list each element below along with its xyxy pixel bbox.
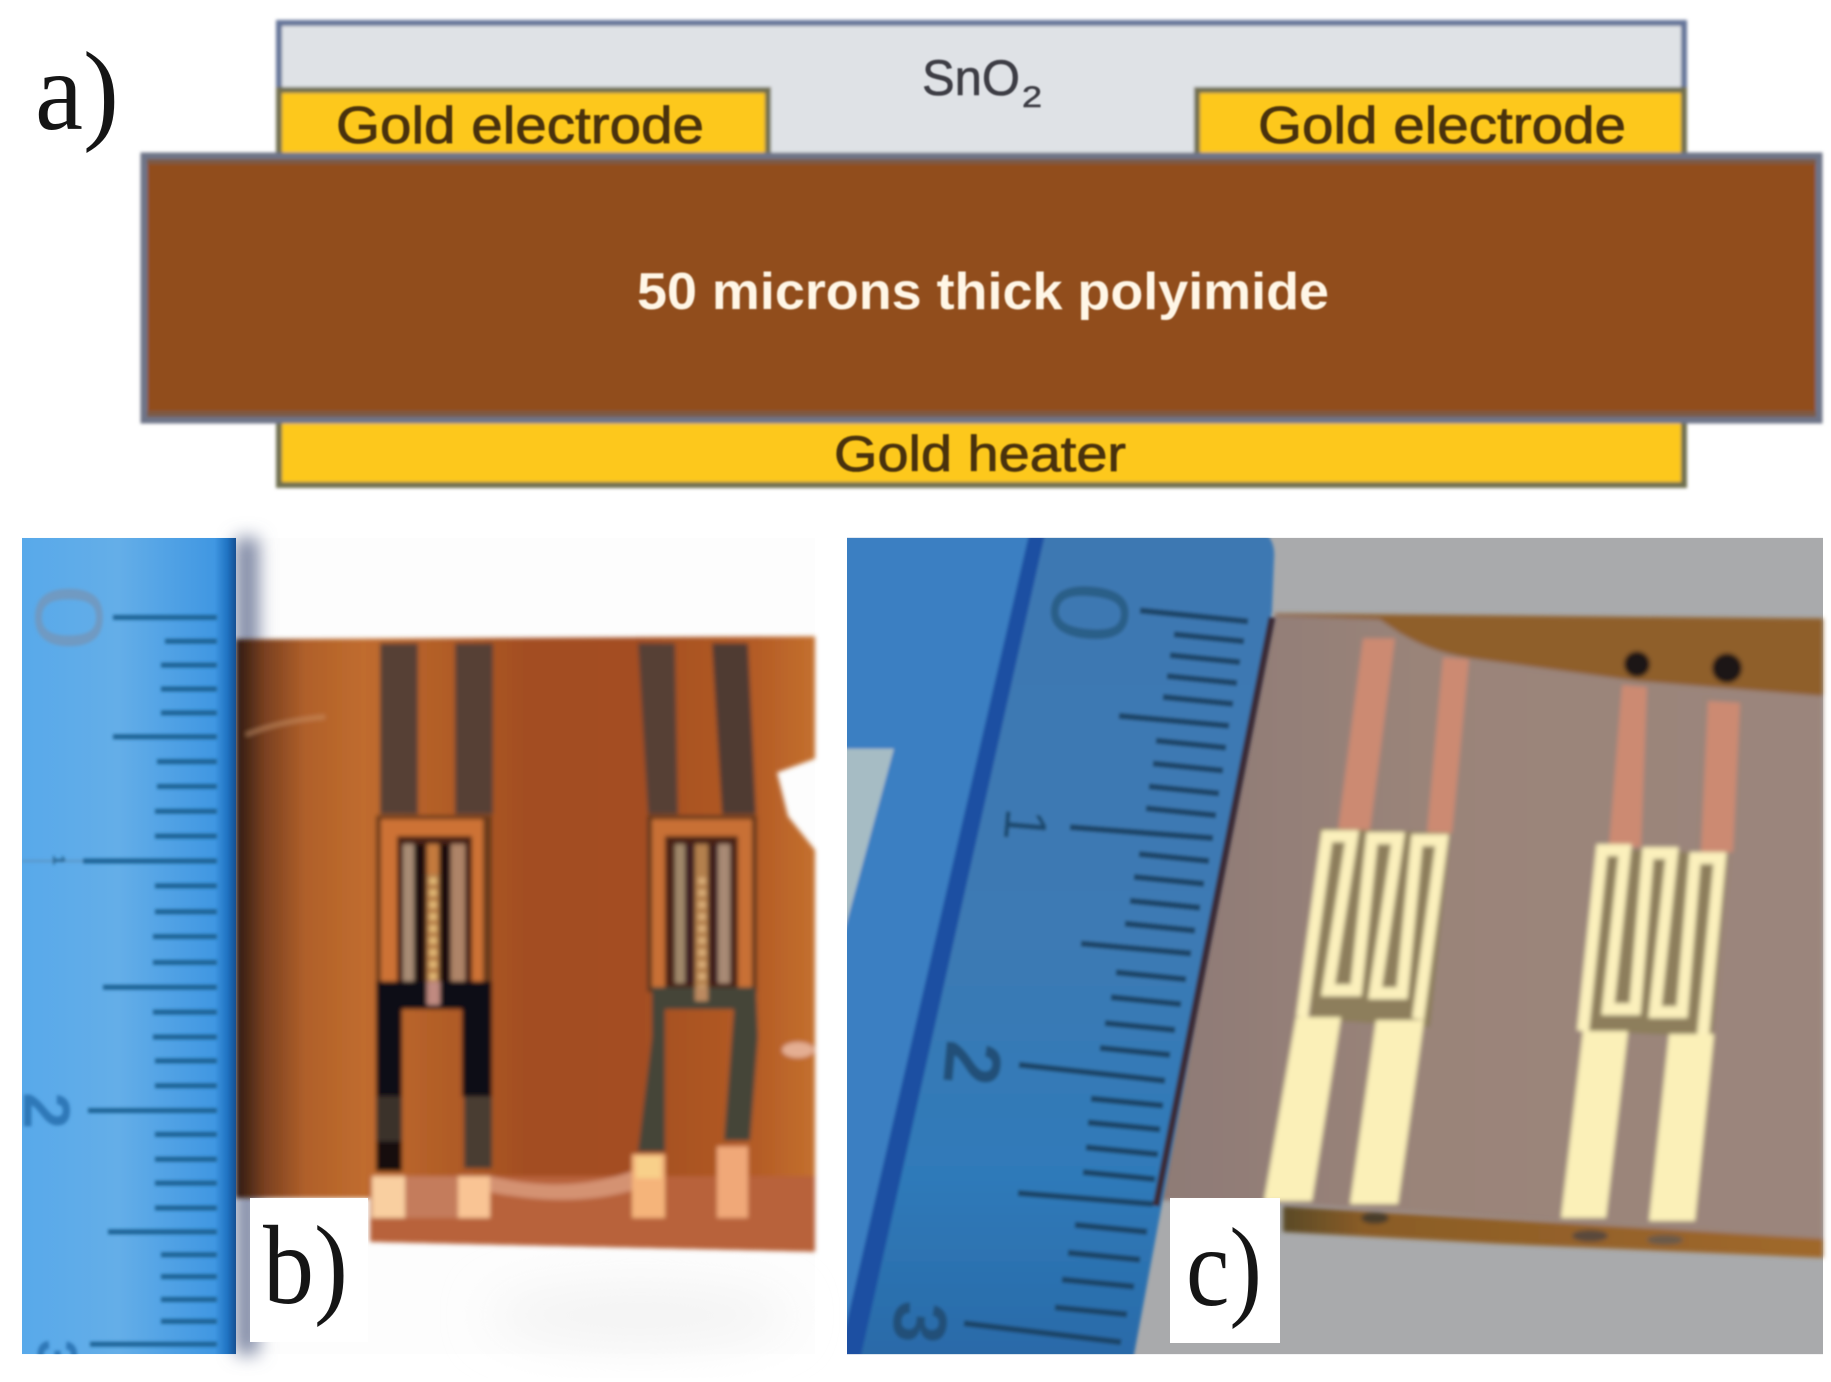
glare streak — [246, 717, 325, 735]
label box: b): b) — [263, 1204, 348, 1328]
label: polyimide: 50 microns thick polyimide — [637, 263, 1329, 321]
blue ruler — [10, 538, 236, 1371]
sensor c2 meander — [1561, 848, 1728, 1221]
label box: b) — [250, 1198, 368, 1342]
ruler digit 3: 3 — [875, 1298, 964, 1347]
ruler tick marks — [83, 617, 217, 1344]
dark bracket and legs — [638, 987, 758, 1151]
grey film — [1159, 615, 1823, 1240]
gold pads — [372, 1176, 405, 1218]
ruler tick marks — [964, 610, 1248, 1342]
label box: c) — [1170, 1198, 1280, 1343]
photo background — [22, 538, 815, 1354]
gold pads — [632, 1154, 665, 1218]
upper contact strips — [638, 643, 678, 814]
minor mark at 1 cm — [22, 860, 83, 862]
layer: left gold electrode — [279, 90, 768, 158]
salmon traces — [1338, 638, 1740, 852]
lower legs — [376, 1097, 402, 1168]
ruler digit 2: 2 — [926, 1037, 1019, 1089]
sensor c1 meander — [1264, 828, 1450, 1204]
ruler digit 3: 3 — [26, 1340, 89, 1371]
panel a: layer stack cross-section — [144, 23, 1819, 485]
ruler digit 1: 1 — [49, 855, 69, 865]
label: SnO2: 2 — [1022, 81, 1042, 114]
label: SnO2: SnO — [922, 50, 1020, 106]
panel c: photo of sensor on grey polyimide — [838, 530, 1823, 1360]
meander frame — [647, 815, 757, 992]
blue ruler angled — [838, 530, 1274, 1360]
ruler digit 0: 0 — [15, 584, 122, 651]
upper contact strips — [380, 643, 418, 814]
top backing strip — [1274, 613, 1823, 729]
meander frame — [376, 815, 492, 984]
film lower strip — [370, 1176, 815, 1252]
grey background — [847, 538, 1823, 1354]
left ruler stripe area — [847, 538, 1028, 1322]
bottom backing strip — [1283, 1206, 1823, 1258]
layer: SnO2 film — [279, 23, 1684, 158]
inner meander — [665, 836, 738, 990]
panel b: photo of flexible sensor on orange polyimide — [10, 538, 815, 1371]
sensor 1 — [372, 643, 493, 1218]
ruler digit 2: 2 — [10, 1092, 84, 1129]
ruler digit 1: 1 — [991, 806, 1060, 844]
label box: c): c) — [1186, 1206, 1262, 1330]
layer: polyimide substrate — [144, 156, 1819, 420]
layer: gold heater — [279, 420, 1684, 485]
ruler film edge — [1156, 617, 1272, 1206]
black registration dots — [1624, 651, 1650, 677]
label: left gold electrode: Gold electrode — [336, 97, 704, 155]
polyimide film — [236, 636, 815, 1252]
panel label: a): a) — [35, 30, 119, 154]
inner meander — [397, 836, 472, 983]
ruler digit 0: 0 — [1025, 577, 1153, 648]
lighter band — [490, 1168, 640, 1200]
black bracket and legs — [376, 981, 492, 1097]
pads — [1264, 1017, 1341, 1201]
bottom dark marks — [1361, 1212, 1389, 1224]
pads — [1561, 1031, 1628, 1218]
layer: right gold electrode — [1197, 90, 1684, 158]
right edge glare — [782, 1042, 814, 1058]
dark blue stripe — [838, 530, 1046, 1360]
sensor 2 — [632, 643, 758, 1218]
label: gold heater: Gold heater — [834, 426, 1126, 482]
label: right gold electrode: Gold electrode — [1258, 97, 1626, 155]
